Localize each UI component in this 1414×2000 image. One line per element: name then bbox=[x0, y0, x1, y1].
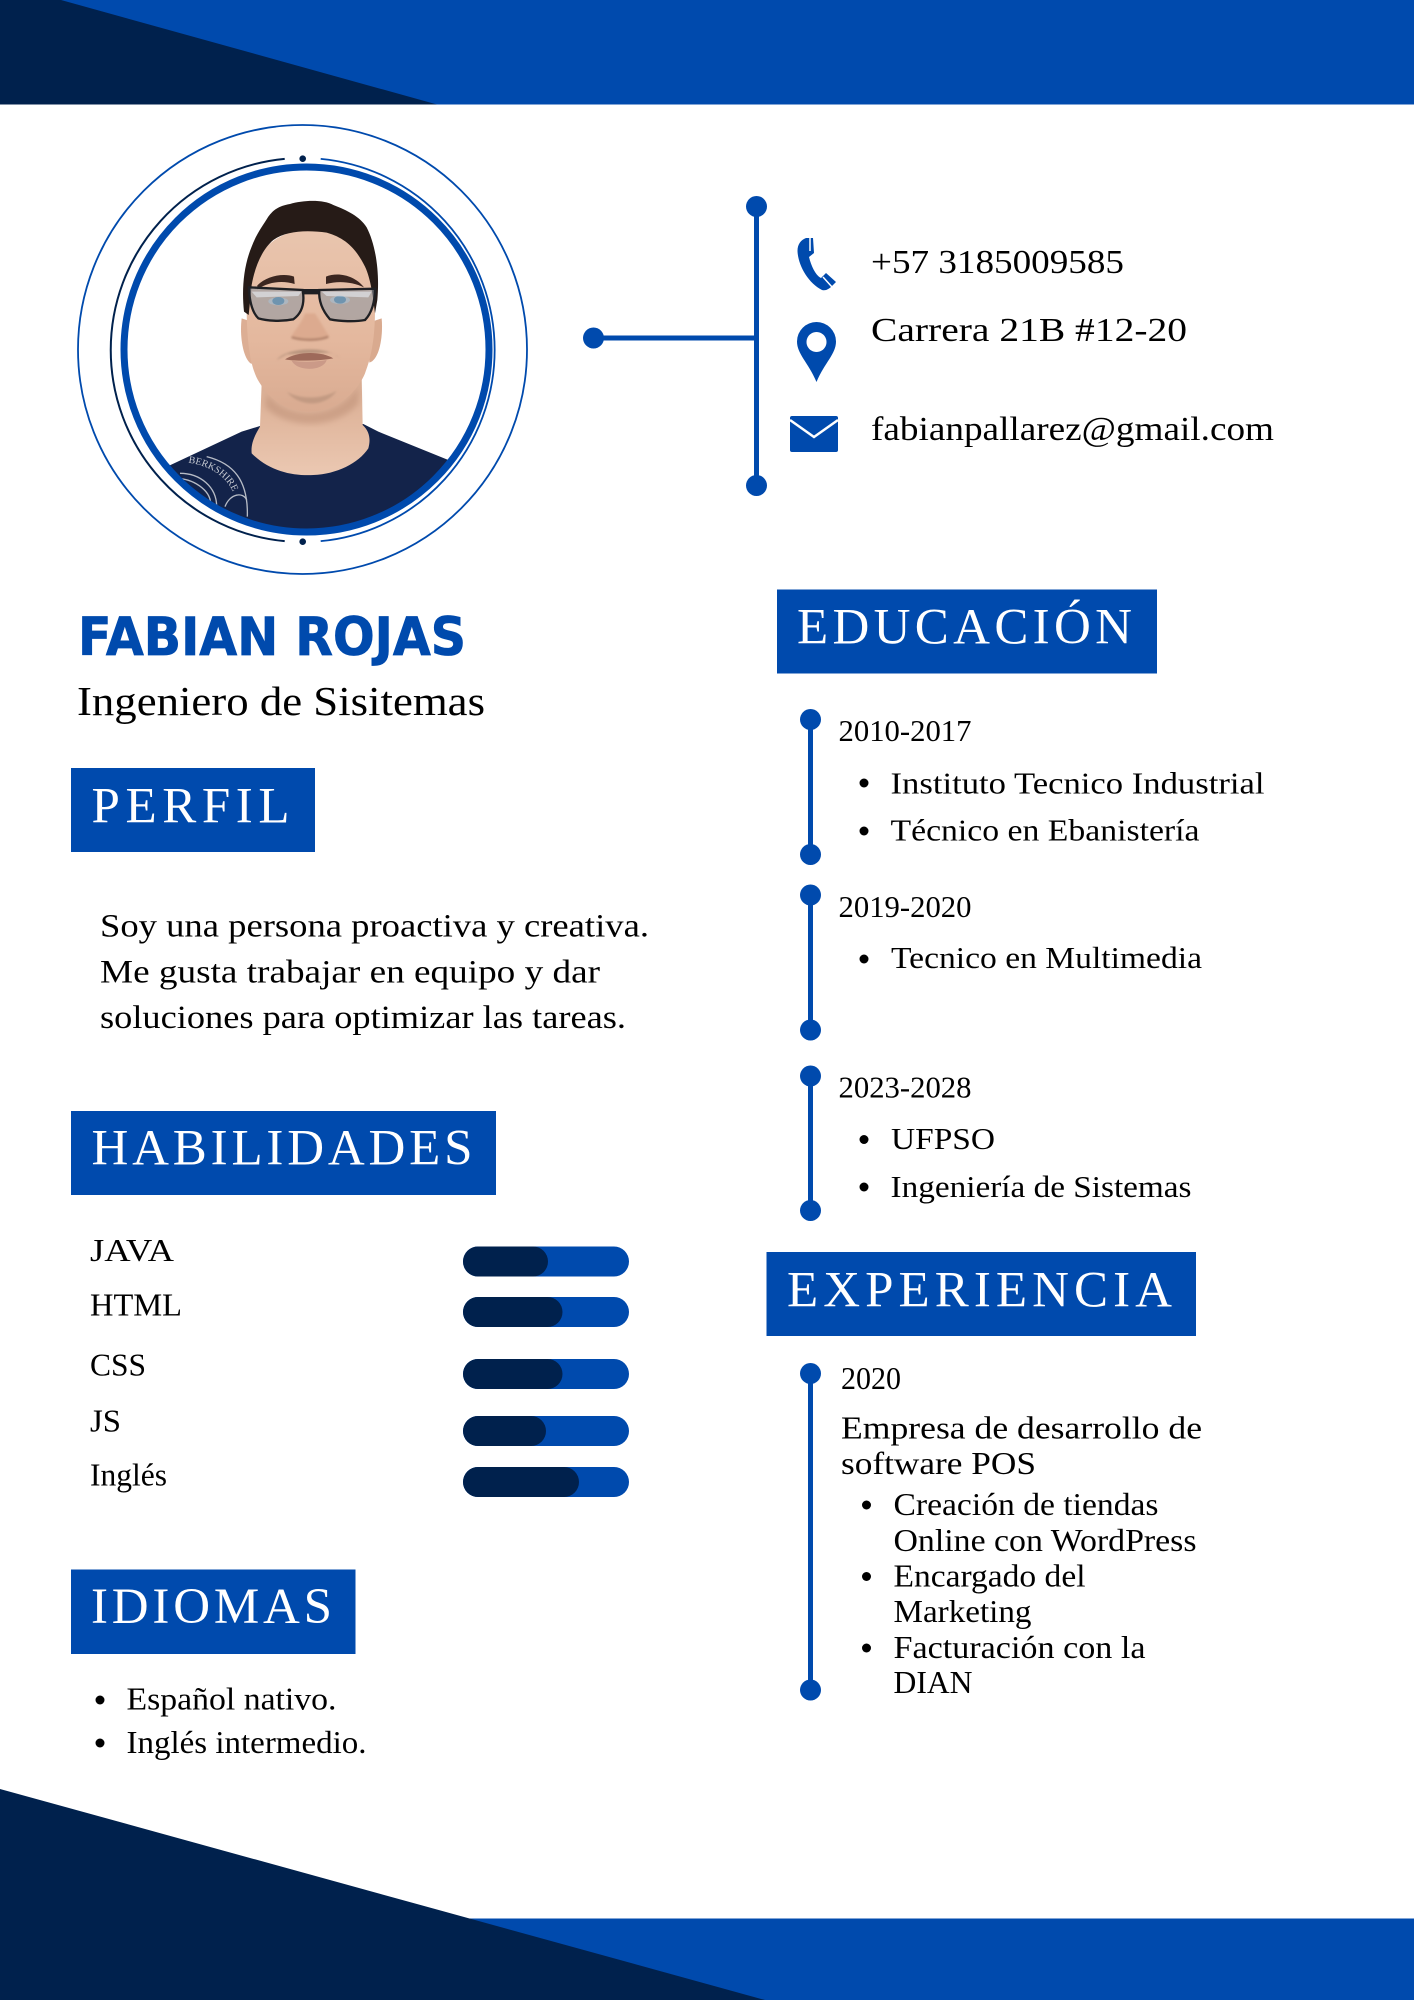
education timeline 2010-2017 bbox=[800, 709, 1264, 865]
education timeline 2010-2017: Instituto Tecnico Industrial bbox=[890, 766, 1264, 800]
heading: perfil bbox=[71, 768, 315, 852]
name: FABIAN ROJAS bbox=[78, 607, 466, 668]
experience timeline: Marketing bbox=[894, 1593, 1032, 1629]
timeline marker bbox=[800, 1363, 821, 1700]
skill labels: JAVA bbox=[90, 1232, 174, 1268]
heading: idiomas: IDIOMAS bbox=[91, 1579, 332, 1635]
contact details: fabianpallarez@gmail.com bbox=[871, 411, 1274, 448]
skill labels: Inglés bbox=[90, 1456, 167, 1492]
experience timeline bbox=[800, 1360, 1202, 1700]
skill labels: JS bbox=[90, 1402, 121, 1438]
experience timeline: 2020 bbox=[841, 1360, 901, 1396]
experience timeline: software POS bbox=[841, 1445, 1036, 1481]
heading: educacion: EDUCACIÓN bbox=[797, 600, 1132, 656]
skill labels: CSS bbox=[90, 1346, 146, 1382]
timeline marker bbox=[800, 884, 821, 1040]
icon: mail bbox=[790, 416, 838, 452]
education timeline 2023-2028 bbox=[800, 1066, 1192, 1221]
experience timeline: Empresa de desarrollo de bbox=[841, 1410, 1202, 1446]
education timeline 2023-2028: UFPSO bbox=[891, 1121, 995, 1156]
education timeline 2019-2020: Tecnico en Multimedia bbox=[891, 940, 1202, 975]
skill labels: HTML bbox=[90, 1286, 182, 1322]
contact connector lines bbox=[583, 196, 767, 496]
skill labels bbox=[90, 1232, 182, 1492]
languages list bbox=[96, 1680, 366, 1760]
experience timeline: Encargado del bbox=[894, 1558, 1086, 1594]
heading: perfil: PERFIL bbox=[92, 778, 290, 834]
profile text: Soy una persona proactiva y creativa. bbox=[100, 908, 649, 944]
education timeline 2019-2020: 2019-2020 bbox=[838, 889, 972, 924]
heading: educacion bbox=[777, 590, 1157, 674]
heading: experiencia: EXPERIENCIA bbox=[787, 1262, 1172, 1318]
icon: phone bbox=[798, 238, 836, 290]
experience timeline: Facturación con la bbox=[894, 1629, 1146, 1665]
heading: idiomas bbox=[71, 1570, 356, 1654]
profile text: soluciones para optimizar las tareas. bbox=[100, 1000, 626, 1036]
job title: Ingeniero de Sisitemas bbox=[77, 678, 485, 724]
education timeline 2023-2028: Ingeniería de Sistemas bbox=[890, 1169, 1192, 1204]
contact details: Carrera 21B #12-20 bbox=[871, 312, 1187, 349]
education timeline 2010-2017: 2010-2017 bbox=[838, 713, 972, 748]
shirt emblem bbox=[180, 456, 248, 517]
skill bars bbox=[463, 1246, 629, 1497]
heading: habilidades: HABILIDADES bbox=[92, 1120, 472, 1176]
experience timeline: DIAN bbox=[894, 1664, 972, 1700]
timeline marker bbox=[800, 1066, 821, 1221]
profile text: Me gusta trabajar en equipo y dar bbox=[100, 954, 600, 990]
heading: habilidades bbox=[71, 1111, 496, 1195]
shirt emblem: BERKSHIRE bbox=[188, 456, 238, 492]
icon: location pin bbox=[797, 322, 836, 382]
portrait illustration bbox=[123, 160, 488, 575]
profile text bbox=[100, 908, 649, 1036]
contact details: +57 3185009585 bbox=[871, 244, 1124, 281]
top banner bbox=[0, 0, 1414, 104]
languages list: Inglés intermedio. bbox=[126, 1724, 366, 1760]
profile photo with circular frame bbox=[77, 124, 528, 575]
experience timeline: Online con WordPress bbox=[894, 1522, 1196, 1558]
languages list: Español nativo. bbox=[126, 1680, 336, 1716]
heading: experiencia bbox=[766, 1252, 1196, 1336]
experience timeline: Creación de tiendas bbox=[894, 1486, 1158, 1522]
contact details bbox=[871, 244, 1274, 448]
timeline marker bbox=[800, 709, 821, 865]
bottom banner bbox=[0, 1789, 1414, 2000]
glasses bbox=[249, 287, 303, 321]
education timeline 2010-2017: Técnico en Ebanistería bbox=[890, 812, 1200, 848]
education timeline 2023-2028: 2023-2028 bbox=[838, 1070, 972, 1104]
education timeline 2019-2020 bbox=[800, 884, 1202, 1040]
